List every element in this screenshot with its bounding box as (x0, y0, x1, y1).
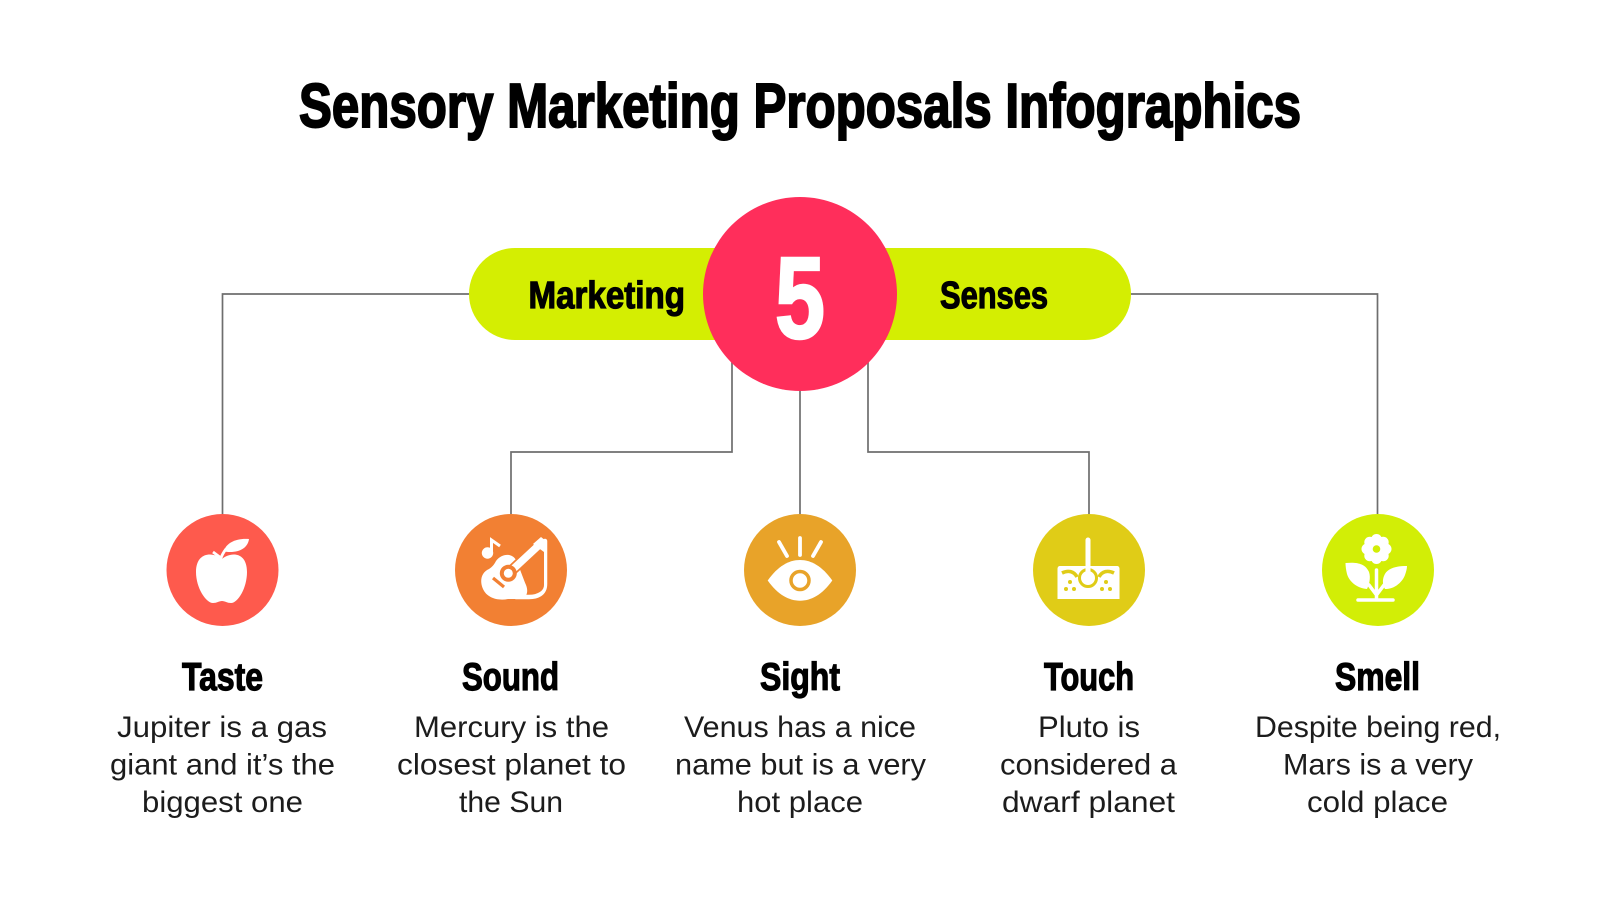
column: Taste (110, 656, 335, 819)
description: Taste: Jupiter is a gas (117, 711, 327, 744)
description: Smell: Mars is a very (1283, 748, 1473, 782)
column: Sound (397, 656, 626, 819)
central circle with number 5: 5 (775, 233, 825, 363)
description: Sound (397, 711, 626, 819)
description: Sound: Mercury is the (414, 711, 609, 744)
description: Sight: name but is a very (675, 748, 926, 782)
icon: flower (Smell) (1322, 514, 1434, 626)
description: Smell (1255, 711, 1501, 819)
heading: Taste: Taste (182, 656, 263, 699)
description: Touch (1000, 711, 1177, 819)
central circle with number 5 (703, 197, 897, 391)
icon: guitar (Sound) (455, 514, 567, 626)
column: Sight (675, 656, 926, 819)
icon: apple (Taste) (166, 514, 278, 626)
heading: Sound: Sound (462, 656, 559, 699)
column: Touch (1000, 656, 1177, 819)
description: Sight: Venus has a nice (684, 711, 916, 744)
description: Sound: closest planet to (397, 748, 626, 782)
description: Touch: Pluto is (1038, 711, 1140, 744)
heading: Touch: Touch (1044, 656, 1134, 699)
heading: Sight: Sight (760, 656, 840, 699)
description: Sound: the Sun (459, 786, 563, 819)
description: Touch: dwarf planet (1002, 786, 1176, 819)
description: Touch: considered a (1000, 748, 1177, 782)
description: Taste (110, 711, 335, 819)
pill label: Marketing: Marketing (528, 275, 685, 317)
icon: eye (Sight) (744, 514, 856, 626)
description: Taste: giant and it’s the (110, 748, 335, 782)
title: Sensory Marketing Proposals Infographics (299, 72, 1301, 141)
heading: Smell: Smell (1335, 656, 1420, 699)
column: Smell (1255, 656, 1501, 819)
central pill (469, 248, 1131, 340)
connector lines (222, 294, 1378, 514)
icon: skin and hair follicle (Touch) (1033, 514, 1145, 626)
description: Taste: biggest one (142, 786, 303, 819)
description: Sight (675, 711, 926, 819)
pill label: Senses: Senses (940, 275, 1048, 317)
description: Smell: cold place (1307, 786, 1448, 819)
description: Smell: Despite being red, (1255, 711, 1501, 744)
description: Sight: hot place (737, 786, 863, 819)
